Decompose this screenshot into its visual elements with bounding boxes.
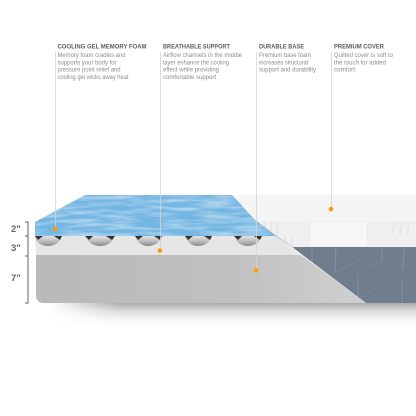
callout: cooling gel memory foam: COOLING GEL MEMORY FOAM [58,44,146,50]
callout: durable base: Premium base foam [259,52,311,59]
callout: breathable support: effect while providing [163,66,220,74]
callout: cooling gel memory foam [53,44,147,231]
label: 3 inch: 3" [11,243,21,254]
callout: cooling gel memory foam: cooling gel wicks away heat [58,74,129,81]
breathable support layer [35,236,301,255]
callout: breathable support: layer enhance the cooling [163,60,230,66]
callout: durable base: support and durability [259,66,317,74]
callout: premium cover: comfort [334,66,355,74]
callout: premium cover: PREMIUM COVER [334,44,384,50]
callout: cooling gel memory foam: Memory foam cradles and [58,52,126,59]
cooling gel memory foam layer [35,195,276,236]
callout: durable base: increases structural [259,60,308,66]
callout: breathable support: Airflow channels in the middle [163,52,243,59]
label: 7 inch: 7" [11,273,21,284]
callout: breathable support: comfortable support [163,74,216,81]
slanted edge of the cover [256,221,294,248]
label: 2 inch: 2" [11,224,21,235]
callout: durable base: DURABLE BASE [259,44,304,50]
callout: premium cover: the touch for added [334,60,387,66]
floor shadow [50,303,416,326]
callout: breathable support: BREATHABLE SUPPORT [163,44,230,50]
gray base fabric [292,247,416,303]
premium quilted cover [232,195,416,247]
airflow channels [35,236,262,246]
callout: premium cover: Quilted cover is soft to [334,52,394,59]
mattress illustration [35,195,416,303]
thickness scale [11,222,28,303]
callout: breathable support [158,44,243,253]
callout: premium cover [329,44,394,211]
callout: durable base [254,44,317,273]
durable base foam layer [36,255,366,303]
callout: cooling gel memory foam: pressure point relief and [58,66,121,74]
callout: cooling gel memory foam: supports your body for [58,60,116,66]
